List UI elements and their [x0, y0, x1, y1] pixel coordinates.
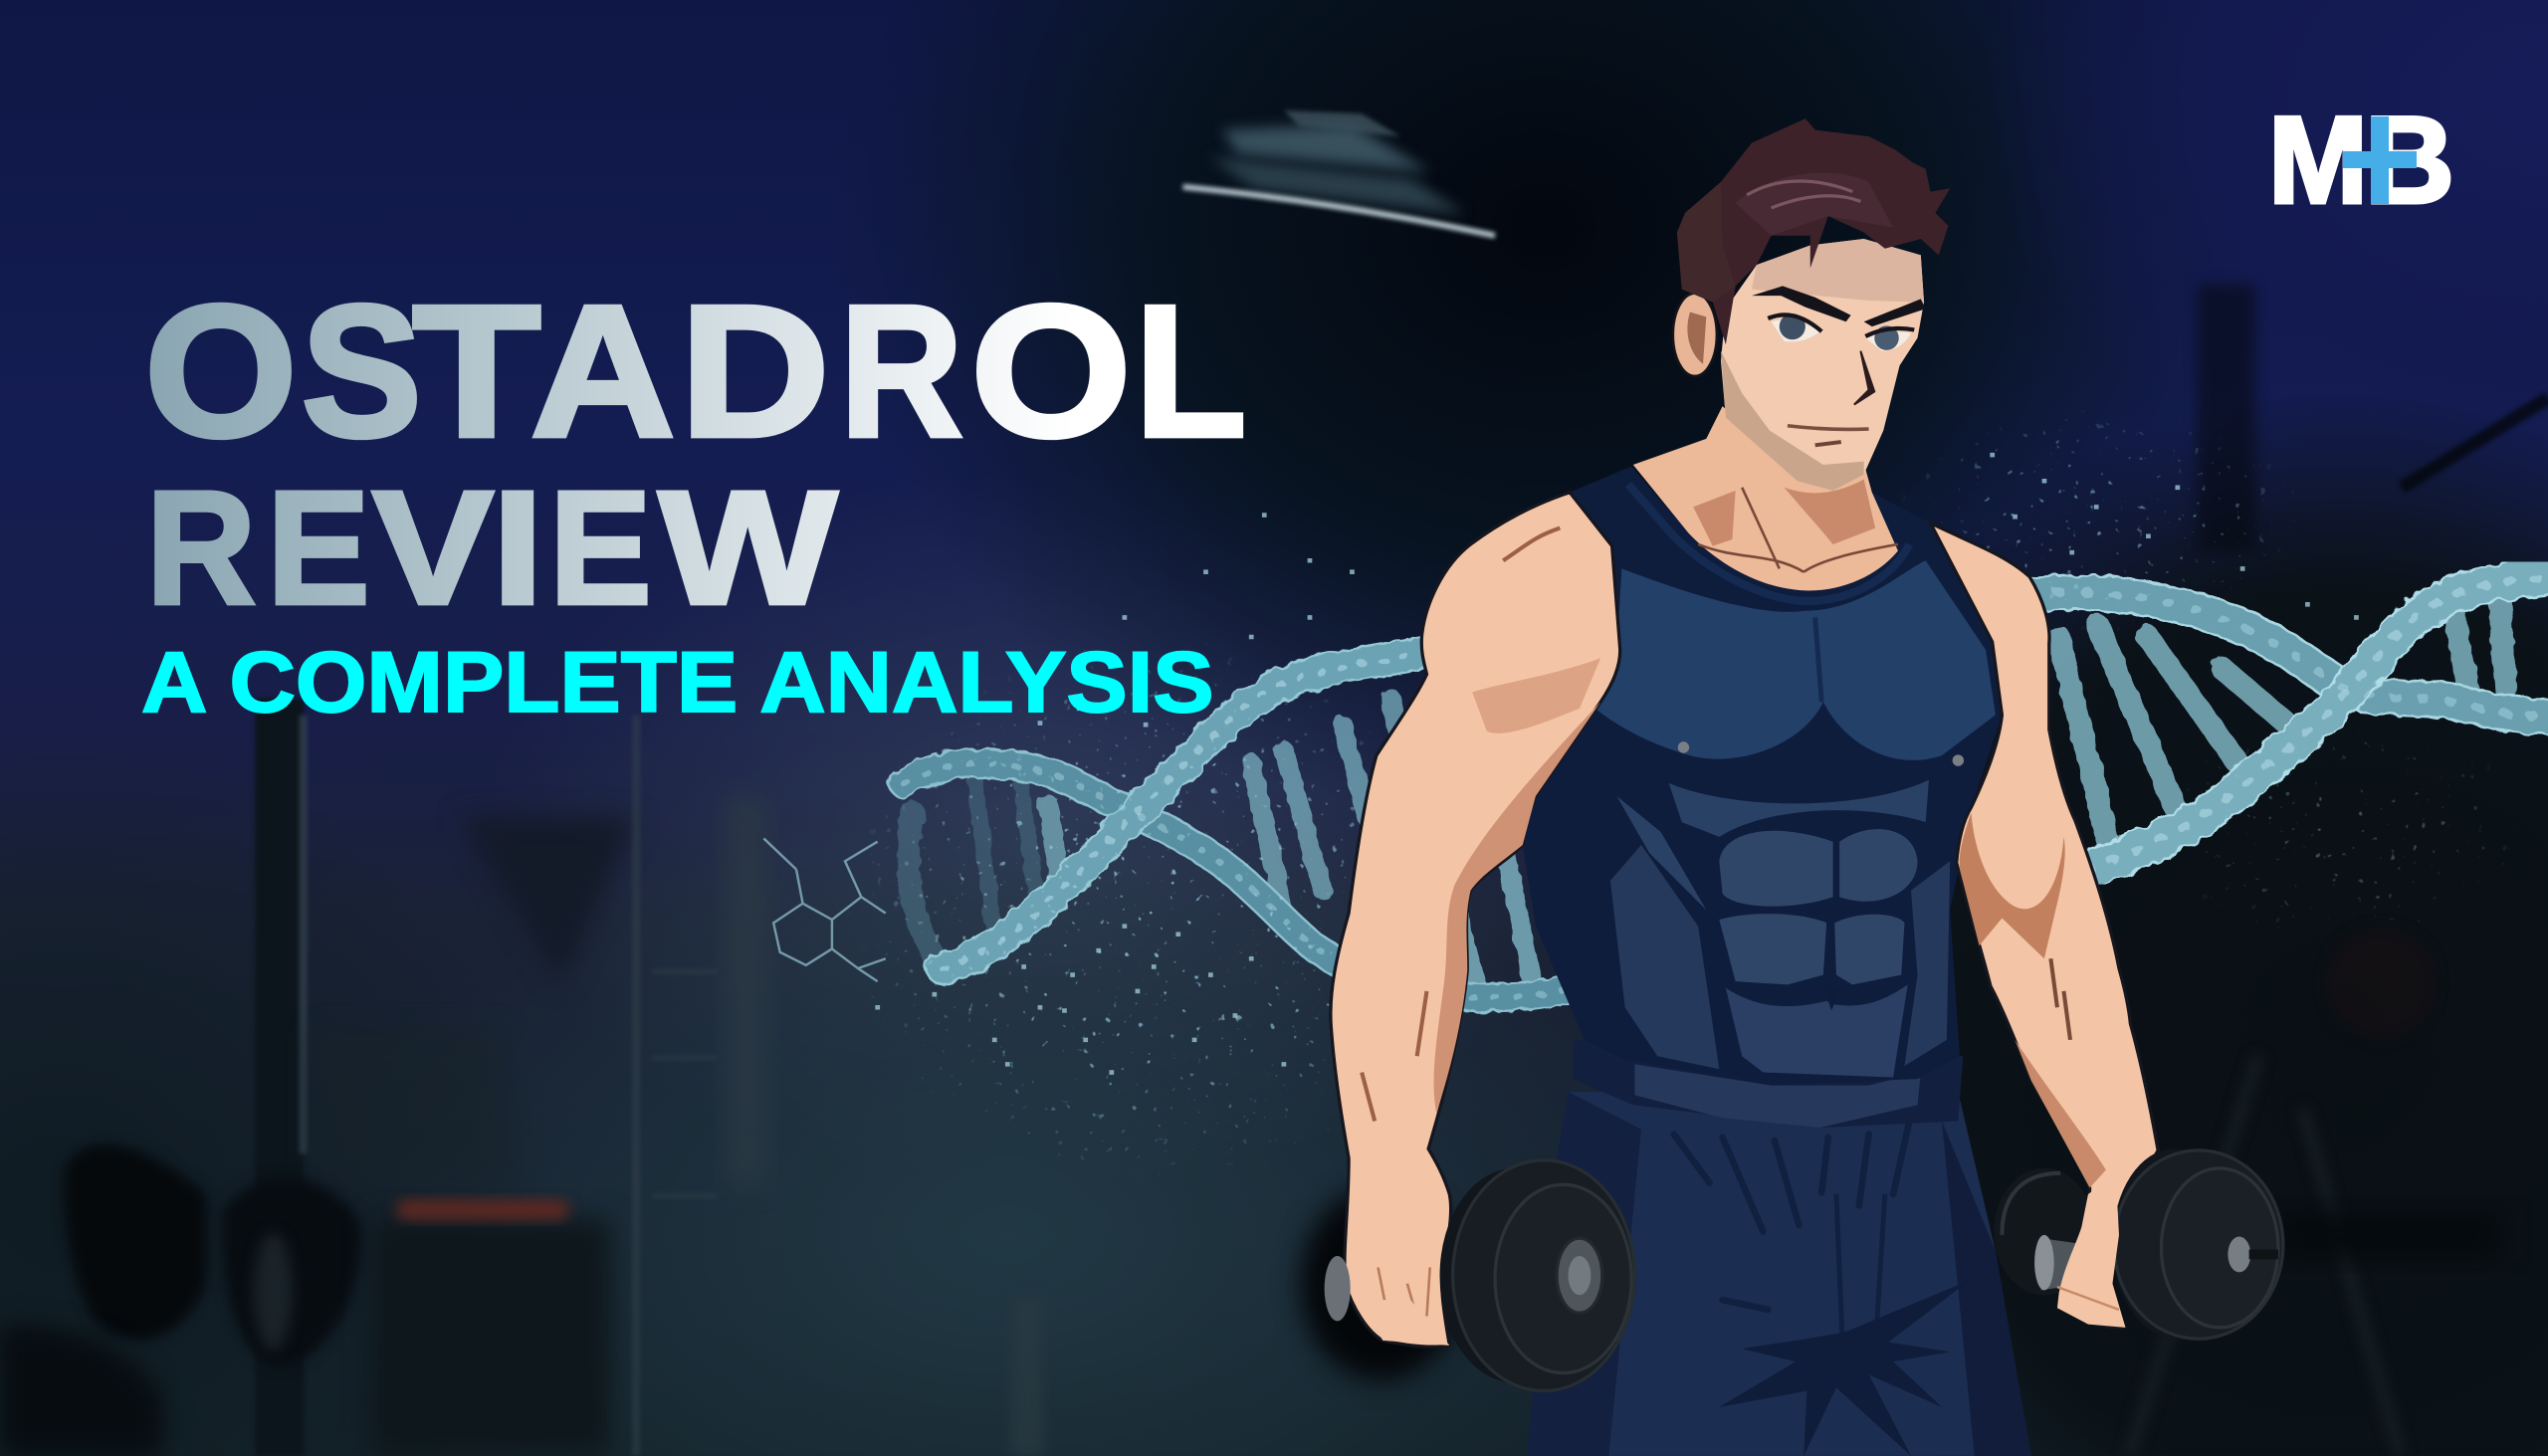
title: REVIEW — [146, 458, 838, 638]
eyebrows — [1752, 286, 1851, 321]
left dumbbell — [1325, 1160, 1634, 1391]
title: REVIEW: W — [659, 458, 838, 638]
title: OSTADROL: O — [144, 266, 298, 476]
title: REVIEW: E — [267, 458, 370, 638]
right dumbbell inner plates — [1994, 1168, 2094, 1295]
head — [1673, 118, 1950, 491]
title: REVIEW: R — [146, 458, 256, 638]
ear — [1673, 294, 1717, 376]
hair — [1677, 118, 1950, 344]
DNA helix, right segment — [2029, 577, 2548, 869]
stubble — [1721, 351, 1864, 491]
logo: M+B — [2268, 92, 2454, 229]
nose and mouth — [1854, 351, 1874, 405]
eyes — [1768, 313, 1914, 351]
title: REVIEW: E — [549, 458, 652, 638]
face — [1721, 239, 1924, 491]
subtitle: A COMPLETE ANALYSIS — [141, 635, 1214, 730]
abs — [1610, 741, 1964, 1077]
pants — [1528, 1092, 2031, 1456]
ceiling lamp — [1183, 110, 1495, 236]
right dumbbell — [2034, 1148, 2283, 1339]
tank top — [1523, 467, 2002, 1086]
title: OSTADROL: D — [680, 266, 830, 476]
title: OSTADROL — [144, 266, 1246, 476]
right arm — [1931, 523, 2158, 1328]
molecule lines — [763, 838, 886, 981]
DNA particles — [845, 406, 2535, 1186]
neck and shoulders — [1633, 406, 1898, 590]
shadow behind left dumbbell — [1300, 1186, 1462, 1381]
DNA helix, left segment — [904, 653, 1580, 998]
title: OSTADROL: R — [840, 266, 962, 476]
title: OSTADROL: L — [1135, 266, 1246, 476]
logo: M+B: B — [2365, 92, 2454, 229]
title: OSTADROL: S — [302, 266, 422, 476]
logo: M+B: M — [2268, 92, 2368, 229]
title: OSTADROL: T — [412, 266, 540, 476]
title: REVIEW: I — [492, 458, 543, 638]
waistband — [1573, 1040, 1963, 1128]
title: OSTADROL: O — [970, 266, 1132, 476]
title: REVIEW: V — [372, 458, 494, 638]
left arm — [1331, 493, 1620, 1347]
title: OSTADROL: A — [531, 266, 675, 476]
character: muscular anime man — [1300, 118, 2283, 1456]
